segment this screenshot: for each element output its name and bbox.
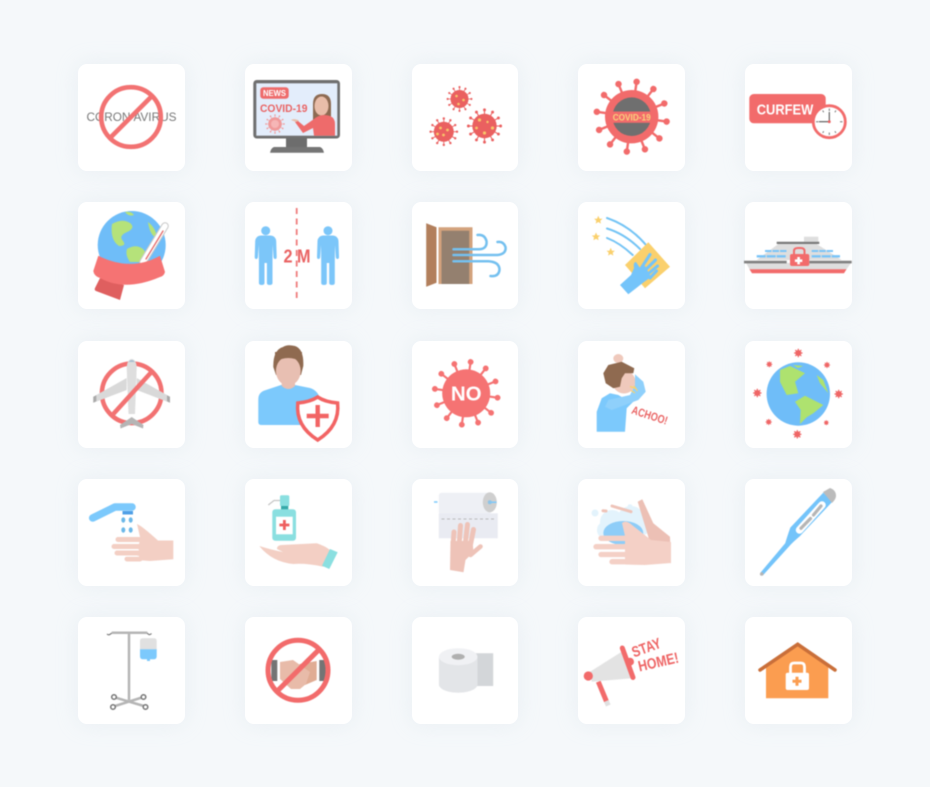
slash <box>113 372 152 414</box>
icon card: no handshake <box>245 617 352 724</box>
prohibition sign <box>101 87 161 147</box>
icon card: curfew <box>745 64 852 170</box>
head <box>273 345 303 389</box>
virus top <box>447 87 471 111</box>
icon card: sanitizer <box>245 479 352 586</box>
curfew banner: CURFEW <box>757 102 814 118</box>
medical case <box>786 663 809 690</box>
faucet <box>93 507 133 518</box>
icon card: stay home megaphone <box>578 617 684 724</box>
water drops <box>121 517 133 533</box>
arm <box>605 374 646 410</box>
towel roll <box>434 492 497 538</box>
globe <box>98 211 166 279</box>
finger tips <box>603 506 631 512</box>
ship superstructure <box>757 237 842 260</box>
large virus <box>592 77 672 157</box>
airplane <box>93 359 170 428</box>
sparkle stars <box>592 216 615 256</box>
stay home text <box>630 635 680 675</box>
icon card: IV drip <box>78 617 184 724</box>
icon card: tap and hand <box>78 479 184 586</box>
house <box>766 645 828 698</box>
icon card: global spread <box>745 341 852 448</box>
hull <box>744 261 852 273</box>
monitor <box>253 80 340 153</box>
icon card: no flights <box>78 341 184 448</box>
clasped hands <box>280 660 317 689</box>
icon card: medical home <box>745 617 852 724</box>
no label: NO <box>450 382 481 406</box>
icon card: open door ventilation <box>412 202 518 308</box>
windows <box>757 251 840 256</box>
door leaf <box>426 223 436 287</box>
left person <box>255 226 277 285</box>
icon card: covid-19 virus <box>578 64 684 170</box>
drip bag <box>140 638 157 661</box>
presenter <box>291 94 335 136</box>
yellow cloth <box>625 242 670 288</box>
display <box>800 505 822 530</box>
surrounding viruses <box>753 349 843 438</box>
gloved hand <box>620 254 658 294</box>
icon card: toilet roll <box>412 617 518 724</box>
virus body <box>430 358 502 429</box>
open hand <box>259 543 338 569</box>
icon card: three viruses <box>412 64 518 170</box>
icon card: quarantine ship <box>745 202 852 308</box>
stay home text: HOME! <box>637 650 680 675</box>
head <box>603 362 636 394</box>
medical lock <box>790 248 809 266</box>
front hand <box>596 522 671 565</box>
icon card: no coronavirus <box>78 64 184 170</box>
icon card: washing with soap <box>578 479 684 586</box>
icon card: paper towel <box>412 479 518 586</box>
back hand <box>638 499 671 563</box>
icon card: wiping surface <box>578 202 684 308</box>
paper sheet <box>470 653 493 686</box>
cuffs <box>271 660 326 681</box>
icon card: no virus <box>412 341 518 448</box>
hand <box>114 524 173 561</box>
soap <box>603 521 643 545</box>
handle <box>598 682 608 706</box>
dashed line <box>296 208 298 302</box>
raised hand <box>613 354 623 363</box>
roll <box>438 648 477 693</box>
icon card: globe with scarf <box>78 202 184 308</box>
thermometer body <box>760 493 833 576</box>
ring <box>102 364 162 423</box>
cap <box>823 488 836 503</box>
clock <box>813 106 845 138</box>
achoo text: ACHOO! <box>630 405 669 428</box>
sneeze ticks <box>630 386 638 393</box>
roof <box>760 644 835 670</box>
icon card: protected person <box>245 341 352 448</box>
hand <box>450 524 480 572</box>
icon card: sneeze into elbow <box>578 341 684 448</box>
collar <box>609 389 620 396</box>
shield <box>298 397 338 440</box>
thermometer <box>143 226 165 262</box>
stay home text: STAY <box>630 635 664 661</box>
prohibition sign <box>268 640 328 700</box>
covid headline: COVID-19 <box>260 103 308 115</box>
body <box>258 385 320 425</box>
coronavirus label: CORON AVIRUS <box>87 110 177 124</box>
distance label: 2 M <box>284 246 310 267</box>
scarf <box>93 256 165 300</box>
icon card: 2m distancing <box>245 202 352 308</box>
megaphone cone <box>584 648 634 682</box>
IV stand <box>107 633 152 709</box>
news badge: NEWS <box>263 89 287 98</box>
clean swooshes <box>607 218 646 255</box>
earth <box>767 362 830 426</box>
door frame <box>438 227 472 284</box>
virus left <box>430 118 457 145</box>
right person <box>317 226 339 285</box>
covid label: COVID-19 <box>613 112 651 122</box>
grey core <box>610 97 654 136</box>
virus right <box>468 110 500 142</box>
foam <box>592 504 651 539</box>
wind <box>453 235 505 276</box>
torso <box>597 393 635 432</box>
small virus <box>266 115 284 133</box>
icon card: TV news <box>245 64 352 170</box>
icon card: thermometer <box>745 479 852 586</box>
bottle <box>268 495 296 541</box>
